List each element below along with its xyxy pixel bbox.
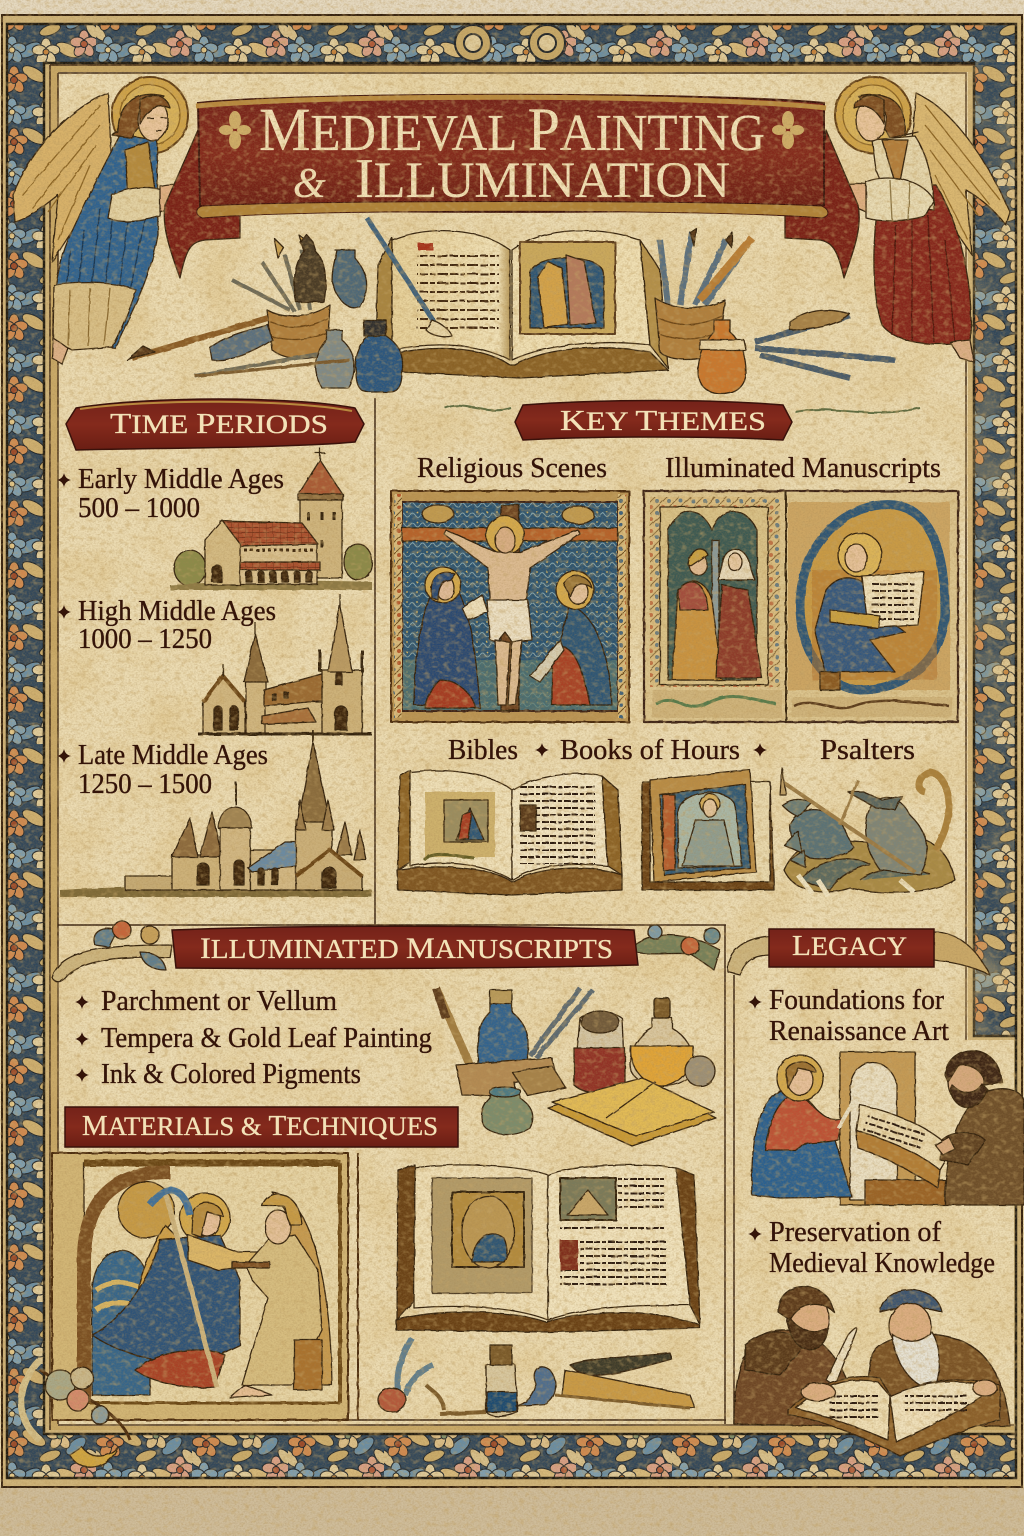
initial letter: [788, 502, 950, 690]
heading: key themes: KEY THEMES: [560, 405, 766, 437]
red jar: [574, 1012, 625, 1092]
heading: key themes: [515, 400, 792, 440]
church: early middle ages: [170, 448, 372, 590]
wing: [13, 93, 112, 262]
brushes left: [232, 250, 310, 312]
icon: materials still life: [436, 988, 716, 1146]
seated figure: [752, 1090, 852, 1198]
legacy banner ornaments: [728, 932, 990, 975]
scribe: [845, 544, 867, 572]
wing: [139, 1225, 190, 1295]
left monk: [734, 1330, 850, 1426]
still life: book and brushes: [127, 218, 895, 394]
heading: legacy: [769, 929, 934, 967]
book miniature: [520, 242, 615, 334]
text: theme captions: Illuminated Manuscripts: [665, 453, 941, 484]
text: materials list: Tempera & Gold Leaf Painting: [101, 1023, 432, 1054]
figure a: [672, 581, 722, 680]
halo: [838, 533, 882, 577]
text: legacy foundations: Renaissance Art: [769, 1016, 949, 1047]
text: time periods list: 1000 – 1250: [78, 624, 212, 655]
sleeve: [866, 178, 934, 221]
wing: [910, 93, 1010, 255]
long brush: [132, 318, 268, 358]
text: legacy preservation: Medieval Knowledge: [769, 1248, 995, 1279]
halo: [112, 77, 188, 153]
text: time periods list: Early Middle Ages: [78, 464, 284, 495]
book pages: [375, 238, 392, 365]
heading: time periods: [66, 399, 364, 450]
title banner: &: [293, 161, 326, 207]
heading: materials and techniques: [65, 1107, 458, 1147]
kneeling angel robe: [92, 1235, 240, 1364]
banner ornaments: [219, 111, 804, 149]
heading: illuminated manuscripts: [172, 926, 638, 969]
left basket: [267, 305, 330, 359]
scroll ornament key themes left: [445, 406, 920, 413]
text: theme captions: Bibles: [448, 735, 518, 766]
text: time periods list: 500 – 1000: [78, 493, 200, 524]
hand: [822, 183, 866, 212]
foot: [950, 340, 974, 362]
panel: illuminated manuscripts: [644, 491, 958, 722]
section dividers: [58, 398, 734, 1424]
text: time periods list: Late Middle Ages: [78, 740, 268, 771]
sleeve: [108, 187, 162, 222]
lens: [685, 1056, 715, 1086]
title banner: [164, 95, 859, 278]
icon: bible book: [397, 770, 622, 895]
john: [560, 605, 612, 705]
amber bottle: [698, 320, 746, 394]
text: materials list: Ink & Colored Pigments: [101, 1059, 361, 1090]
heading: illuminated manuscripts: ILLUMINATED MANUSCRIPTS: [200, 932, 613, 965]
text: time periods list: [57, 464, 284, 800]
heading: legacy: LEGACY: [792, 930, 907, 962]
text: legacy preservation: [748, 1217, 995, 1279]
background ground: [403, 660, 617, 710]
hair and face: [112, 94, 164, 138]
thin brushes: [530, 988, 593, 1058]
quill: [367, 218, 438, 328]
seated mary: [272, 1192, 332, 1385]
banner tails: [164, 130, 859, 278]
right basket: [655, 298, 725, 360]
text: legacy foundations: Foundations for: [769, 985, 945, 1016]
large brush: [436, 988, 470, 1065]
text: materials list: Parchment or Vellum: [101, 986, 337, 1017]
halo: [180, 1193, 230, 1243]
top medallions: [455, 25, 565, 61]
hand: [160, 184, 203, 212]
icon: open illuminated book: [396, 1165, 700, 1332]
blue ink bottle: [356, 320, 403, 392]
text: legacy foundations: [748, 985, 949, 1047]
open book: [788, 1377, 1000, 1456]
book in hand: [462, 595, 488, 620]
jar blue-grey: [316, 330, 354, 388]
title text: MEDIEVAL PAINTING: [259, 97, 765, 164]
banner body: [198, 95, 824, 212]
icon: tools below book: [378, 1338, 695, 1416]
cross: [402, 528, 618, 541]
under robe: [53, 283, 136, 350]
heading: materials and techniques: MATERIALS & TECHNIQUES: [82, 1111, 438, 1142]
right brushes: [660, 232, 750, 305]
foot: [52, 338, 68, 364]
christ body: [444, 530, 580, 605]
scroll and box: [456, 1058, 556, 1096]
alcove: [840, 1052, 915, 1205]
church: high middle ages: [198, 594, 372, 734]
corner floral ornament: [21, 1360, 130, 1467]
robe: [53, 135, 158, 348]
clouds: [422, 505, 454, 523]
right angel: [822, 77, 1010, 362]
halo: [835, 77, 911, 153]
gold book: [548, 1080, 716, 1146]
text: materials list: [75, 986, 432, 1090]
vine ornament left of illuminated manuscripts banner: [52, 921, 720, 982]
book script: [417, 248, 499, 333]
text: time periods list: High Middle Ages: [78, 596, 276, 627]
thin brush front: [195, 360, 350, 376]
scenery: [92, 1251, 150, 1395]
monk: [945, 1089, 1024, 1205]
open book on lectern: [862, 572, 924, 628]
right tools: [755, 316, 895, 378]
bottom vines: [652, 690, 782, 718]
text: theme captions: Psalters: [820, 735, 915, 766]
bottles behind: [294, 234, 326, 302]
text: theme captions: Religious Scenes: [417, 453, 607, 484]
left angel: [13, 77, 203, 364]
blue bottle: [478, 1002, 528, 1064]
amber flask: [630, 1018, 694, 1086]
hair and face: [858, 94, 918, 138]
small green pot: [482, 1090, 533, 1135]
panel: annunciation miniature: [52, 1153, 358, 1420]
icon: book of hours: [642, 770, 774, 890]
christ halo: [486, 516, 524, 554]
staff: [166, 1195, 217, 1387]
figure b: [716, 585, 762, 678]
mary: [414, 580, 480, 708]
text: theme captions: Books of Hours: [560, 735, 740, 766]
title banner: ILLUMINATION: [355, 148, 730, 210]
icon: dragon and spear: [780, 768, 955, 896]
church: late middle ages: [60, 730, 372, 897]
tunic: [872, 136, 934, 210]
panel: crucifixion: [391, 491, 629, 722]
red robe: [874, 185, 971, 344]
text: theme captions: [417, 453, 941, 766]
heading: time periods: TIME PERIODS: [110, 408, 328, 440]
text: legacy preservation: Preservation of: [769, 1217, 942, 1248]
right monk: [860, 1334, 1010, 1426]
illustration: monk with manuscript: [752, 1050, 1024, 1205]
lectern: [865, 1180, 945, 1205]
text: time periods list: 1250 – 1500: [78, 769, 212, 800]
illustration: two monks with book: [734, 1286, 1010, 1456]
